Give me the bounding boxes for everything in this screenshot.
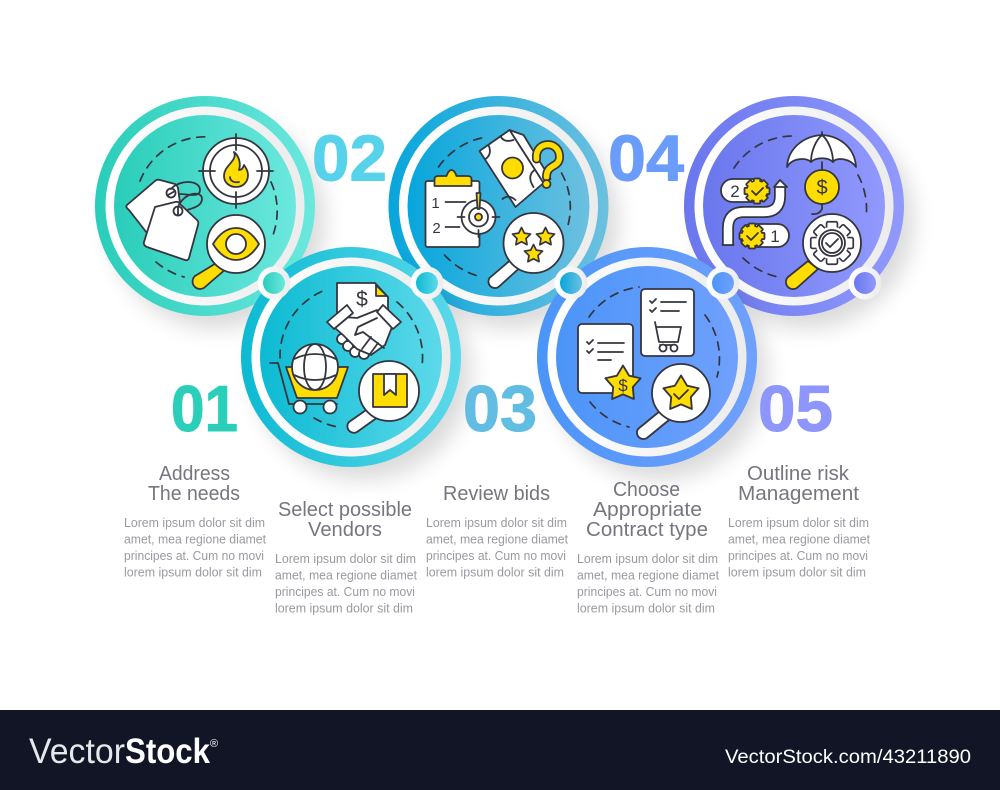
number 02: 02 bbox=[312, 122, 387, 194]
icon: clipboard with target: 1 bbox=[431, 195, 440, 212]
body text bbox=[577, 552, 720, 616]
icon: magnifier with star check bbox=[637, 364, 710, 439]
heading: choose appropriate contract type: Choose bbox=[613, 479, 680, 501]
icon: stepped route: 1 bbox=[770, 227, 780, 246]
icon: banknote and question mark bbox=[480, 130, 560, 207]
icon: invoice and handshake bbox=[327, 283, 401, 359]
footer image id: VectorStock.com/43211890 bbox=[725, 747, 971, 768]
icon: umbrella and coin bbox=[787, 132, 856, 214]
heading: select possible vendors: Vendors bbox=[308, 519, 382, 541]
body text: Lorem ipsum dolor sit dim bbox=[577, 552, 718, 566]
icon: price tags bbox=[126, 180, 202, 260]
heading: address the needs: The needs bbox=[148, 483, 240, 505]
body text: lorem ipsum dolor sit dim bbox=[577, 602, 715, 616]
body text: amet, mea regione diamet bbox=[728, 532, 871, 546]
heading: select possible vendors: Select possible bbox=[278, 499, 412, 521]
body text: amet, mea regione diamet bbox=[577, 568, 720, 582]
connector dot 4 bbox=[706, 266, 740, 300]
body text bbox=[426, 516, 569, 580]
icon: contract document with dollar star bbox=[578, 324, 641, 399]
number 01: 01 bbox=[171, 372, 238, 445]
number 04: 04 bbox=[608, 122, 684, 194]
footer bar bbox=[0, 710, 1000, 790]
icon: stepped route: 2 bbox=[730, 182, 740, 201]
heading: outline risk management bbox=[738, 463, 859, 505]
footer logo: ® bbox=[210, 738, 218, 750]
heading: review bids: Review bids bbox=[443, 483, 550, 505]
body text: amet, mea regione diamet bbox=[275, 568, 418, 582]
icon: magnifier with eye bbox=[193, 215, 265, 289]
heading: address the needs bbox=[148, 463, 240, 505]
body text: lorem ipsum dolor sit dim bbox=[124, 566, 262, 580]
body text bbox=[728, 516, 871, 580]
heading: outline risk management: Outline risk bbox=[747, 463, 850, 485]
body text: lorem ipsum dolor sit dim bbox=[275, 602, 413, 616]
body text: amet, mea regione diamet bbox=[426, 532, 569, 546]
icon: magnifier with package bbox=[347, 361, 419, 433]
heading: outline risk management: Management bbox=[738, 483, 859, 505]
icon: clipboard with target bbox=[426, 170, 500, 247]
number 03: 03 bbox=[463, 372, 537, 445]
icon: contract document with dollar star: $ bbox=[618, 376, 628, 395]
heading: choose appropriate contract type: Appropriate bbox=[593, 499, 702, 521]
body text: Lorem ipsum dolor sit dim bbox=[124, 516, 265, 530]
icon: stepped route bbox=[721, 178, 789, 248]
heading: choose appropriate contract type bbox=[586, 479, 708, 541]
connector dot 5 bbox=[848, 266, 882, 300]
icon: invoice and handshake: $ bbox=[356, 288, 368, 311]
icon: umbrella and coin: $ bbox=[816, 177, 828, 199]
panel: circle 1 address the needs bbox=[95, 96, 325, 329]
panel: circle 4 choose appropriate contract type bbox=[537, 247, 767, 480]
body text: principes at. Cum no movi bbox=[124, 549, 264, 563]
icon: clipboard with target: 2 bbox=[432, 220, 441, 237]
icon: order document with cart bbox=[641, 289, 694, 356]
body text: Lorem ipsum dolor sit dim bbox=[728, 516, 869, 530]
number 05: 05 bbox=[758, 372, 833, 445]
body text: lorem ipsum dolor sit dim bbox=[728, 566, 866, 580]
connector dot 3 bbox=[554, 266, 588, 300]
text block: step 4 bbox=[577, 479, 720, 616]
panel: circle 2 select possible vendors bbox=[241, 247, 471, 480]
panel: circle 5 outline risk management bbox=[684, 96, 914, 329]
panel: circle 3 review bids bbox=[388, 96, 618, 329]
icon: magnifier with stars bbox=[488, 213, 564, 288]
body text: amet, mea regione diamet bbox=[124, 532, 267, 546]
body text bbox=[124, 516, 267, 580]
footer logo: Stock bbox=[125, 732, 210, 771]
body text: lorem ipsum dolor sit dim bbox=[426, 566, 564, 580]
body text: principes at. Cum no movi bbox=[426, 549, 566, 563]
text block: step 2 bbox=[275, 499, 418, 616]
body text bbox=[275, 552, 418, 616]
heading: address the needs: Address bbox=[159, 463, 230, 485]
body text: principes at. Cum no movi bbox=[728, 549, 868, 563]
body text: principes at. Cum no movi bbox=[275, 585, 415, 599]
icon: target with flame bbox=[199, 134, 273, 208]
footer logo: Vector bbox=[29, 732, 125, 771]
body text: Lorem ipsum dolor sit dim bbox=[426, 516, 567, 530]
text block: step 5 bbox=[728, 463, 871, 580]
connector dot 2 bbox=[410, 266, 444, 300]
connector dot 1 bbox=[258, 266, 290, 300]
heading: choose appropriate contract type: Contract type bbox=[586, 519, 708, 541]
text block: step 3 bbox=[426, 483, 569, 580]
body text: principes at. Cum no movi bbox=[577, 585, 717, 599]
text block: step 1 bbox=[124, 463, 267, 580]
icon: shopping cart with globe bbox=[270, 344, 348, 414]
body text: Lorem ipsum dolor sit dim bbox=[275, 552, 416, 566]
icon: magnifier with gear bbox=[786, 214, 861, 289]
heading: select possible vendors bbox=[278, 499, 412, 541]
footer logo bbox=[29, 732, 218, 771]
